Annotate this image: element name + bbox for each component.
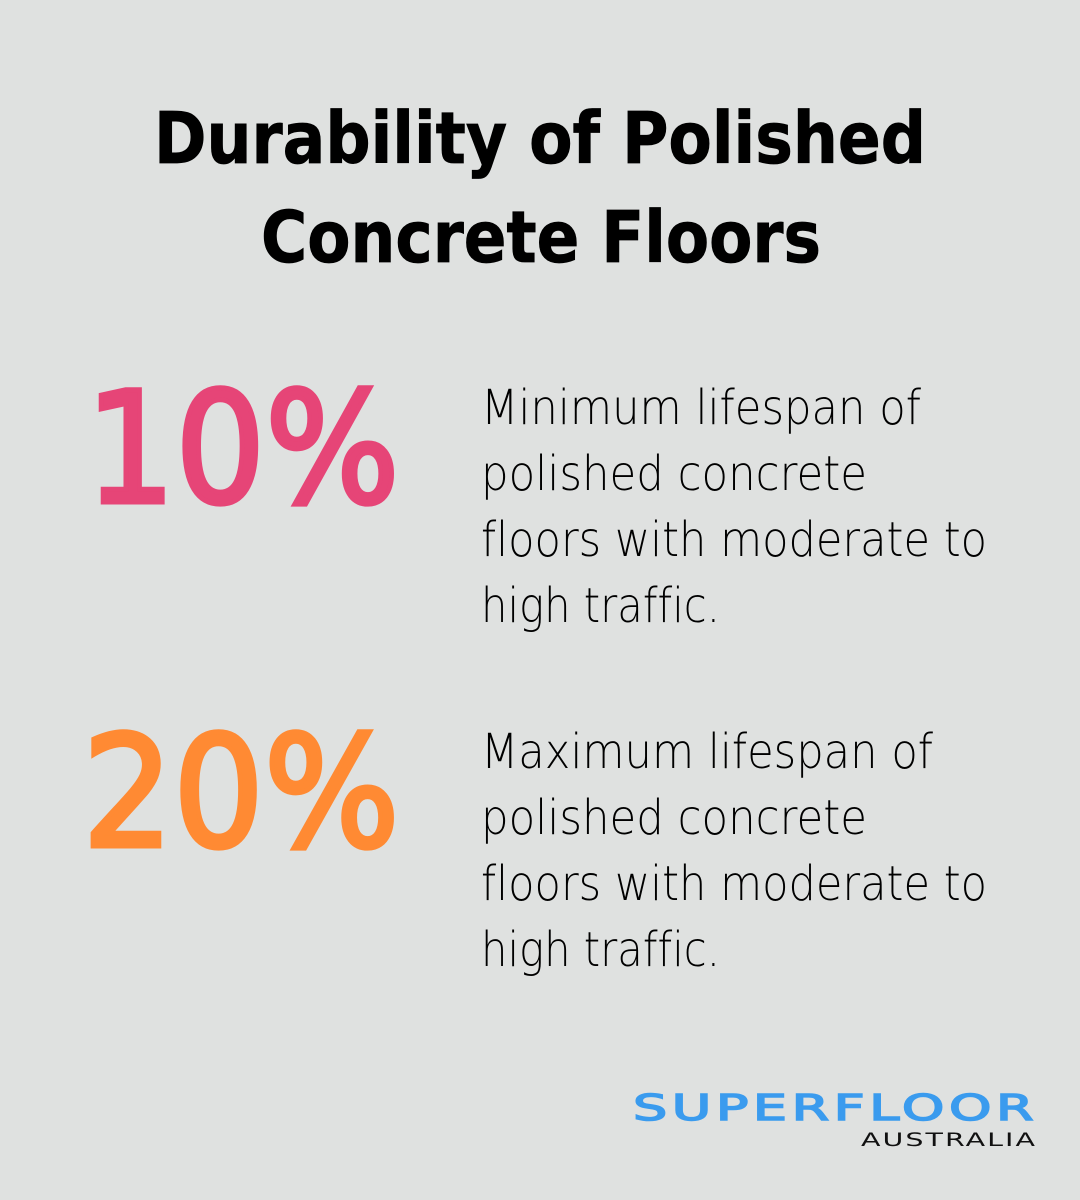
text block: minimum lifespan: floors with moderate to [481, 512, 987, 568]
text block: maximum lifespan: high traffic. [481, 922, 720, 978]
logo: Superfloor Australia: AUSTRALIA [861, 1129, 1035, 1151]
stat: 20%: 20% [82, 704, 400, 883]
title: Concrete Floors [261, 196, 821, 279]
text block: maximum lifespan: floors with moderate to [481, 856, 987, 912]
text block: minimum lifespan: high traffic. [481, 578, 720, 634]
logo: Superfloor Australia [633, 1086, 1035, 1151]
text block: maximum lifespan: polished concrete [481, 790, 867, 846]
text block: minimum lifespan: polished concrete [481, 446, 867, 502]
text block: maximum lifespan: Maximum lifespan of [481, 724, 933, 780]
text block: minimum lifespan [481, 380, 987, 634]
title [154, 97, 926, 279]
logo: Superfloor Australia: SUPERFLOOR [633, 1086, 1034, 1129]
text block: maximum lifespan [481, 724, 987, 978]
text block: minimum lifespan: Minimum lifespan of [481, 380, 921, 436]
title: Durability of Polished [154, 97, 926, 180]
stat: 10%: 10% [86, 360, 400, 539]
